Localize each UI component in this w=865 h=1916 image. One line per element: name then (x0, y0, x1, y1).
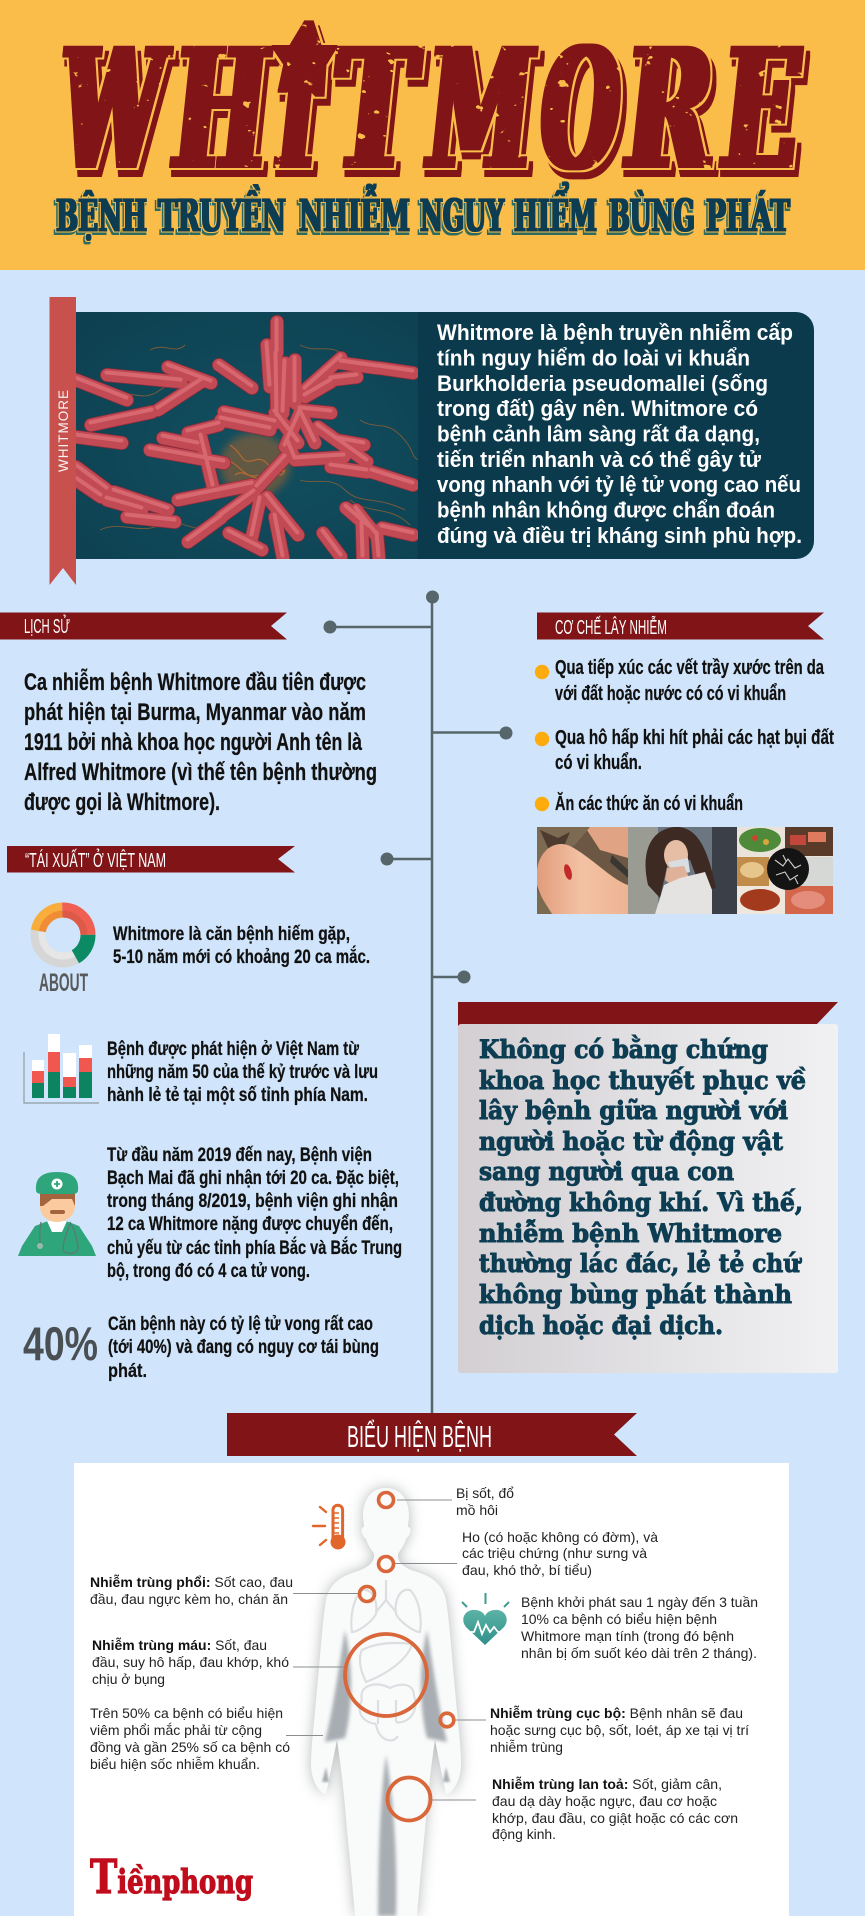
label: cough: đau, khó thở, bí tiểu) (462, 1563, 592, 1578)
intro text: tính nguy hiểm do loài vi khuẩn (437, 346, 750, 370)
label: over 50 percent (90, 1706, 290, 1772)
subtitle: NHIỄM (299, 182, 410, 242)
marker circles (345, 1492, 454, 1820)
fact 1 text: 5-10 năm mới có khoảng 20 ca mắc. (113, 944, 370, 968)
banner: Tái xuất ở Việt Nam (7, 846, 295, 872)
subtitle: TRUYỀN (158, 183, 286, 242)
ribbon: WHITMORE: WHITMORE (56, 390, 71, 472)
transmission bullet list: có vi khuẩn. (555, 752, 642, 774)
photo: food collage (737, 827, 833, 914)
intro panel (76, 312, 814, 559)
label: lung infection: đầu, đau ngực kèm ho, chán ăn (90, 1592, 288, 1607)
fact 2 text (107, 1038, 378, 1106)
callout text: sang người qua con (479, 1157, 734, 1186)
icon: bar chart (24, 1034, 99, 1103)
label: onset: Whitmore mạn tính (trong đó bệnh (521, 1629, 734, 1644)
fact 4 text (108, 1313, 379, 1382)
fact 1 text (113, 923, 370, 968)
banner: Tái xuất ở Việt Nam: “TÁI XUẤT” Ở VIỆT NAM (25, 848, 166, 872)
title: WHITMORE: M (419, 13, 542, 207)
fact 3 text: Bạch Mai đã ghi nhận tới 20 ca. Đặc biệt, (107, 1167, 399, 1189)
label: disseminated infection (492, 1776, 738, 1842)
label: local infection: nhiễm trùng (490, 1739, 563, 1755)
label: lung infection: Nhiễm trùng phổi: Sốt cao, đau (90, 1574, 293, 1590)
banner: Lịch sử: LỊCH SỬ (24, 614, 70, 638)
intro text: Whitmore là bệnh truyền nhiễm cấp (437, 320, 793, 345)
organs (351, 1580, 421, 1740)
label: onset: Bệnh khởi phát sau 1 ngày đến 3 tuần (521, 1595, 758, 1610)
callout text: nhiễm bệnh Whitmore (479, 1219, 782, 1248)
callout text: người hoặc từ động vật (479, 1127, 783, 1156)
label: disseminated infection: khớp, đau đầu, co giật hoặc có các cơn (492, 1811, 738, 1826)
ribbon: WHITMORE (50, 297, 76, 585)
fact 2 text: hành lẻ tẻ tại một số tỉnh phía Nam. (107, 1084, 368, 1106)
label: local infection: hoặc sưng cục bộ, sốt, loét, áp xe tại vị trí (490, 1723, 749, 1738)
label: onset (521, 1595, 758, 1661)
subtitle (56, 180, 790, 242)
label: fever: mồ hôi (456, 1503, 498, 1518)
label: disseminated infection: Nhiễm trùng lan toả: Sốt, giảm cân, (492, 1776, 722, 1792)
label: fever: Bị sốt, đổ (456, 1486, 514, 1501)
label: over 50 percent: viêm phổi mắc phải từ cộng (90, 1722, 262, 1738)
callout text: Không có bằng chứng (479, 1035, 768, 1064)
transmission bullet list: Ăn các thức ăn có vi khuẩn (555, 792, 743, 815)
subtitle: BỆNH (56, 188, 147, 242)
callout text: không bùng phát thành (479, 1280, 792, 1309)
logo: Tiền phong: Tiềnphong (90, 1850, 253, 1905)
fact 2 text: Bệnh được phát hiện ở Việt Nam từ (107, 1038, 360, 1060)
history text: phát hiện tại Burma, Myanmar vào năm (24, 699, 366, 726)
label: over 50 percent: biểu hiện sốc nhiễm khuẩn. (90, 1756, 260, 1772)
title: WHITMORE (51, 13, 809, 207)
label: blood infection: chịu ở bụng (92, 1672, 165, 1687)
title: WHITMORE: T (323, 13, 425, 207)
intro text: đúng và điều trị kháng sinh phù hợp. (437, 523, 802, 548)
history text: Ca nhiễm bệnh Whitmore đầu tiên được (24, 668, 366, 696)
banner: Cơ chế lây nhiễm: CƠ CHẾ LÂY NHIỄM (555, 616, 667, 639)
icon: doctor (18, 1172, 96, 1256)
fact 3 text: bộ, trong đó có 4 ca tử vong. (107, 1260, 310, 1282)
intro text: bệnh nhân không được chẩn đoán (437, 498, 775, 522)
banner: Cơ chế lây nhiễm (537, 612, 824, 640)
intro text (437, 320, 802, 548)
stat: 40%: 40% (23, 1317, 98, 1370)
label: onset: 10% ca bệnh có biểu hiện bệnh (521, 1612, 717, 1627)
banner: Lịch sử (0, 612, 287, 640)
heart icon (462, 1593, 509, 1645)
transmission bullet list (535, 657, 834, 815)
title: WHITMORE: I (270, 13, 326, 207)
label: blood infection (92, 1637, 289, 1687)
title: WHITMORE: W (51, 13, 173, 207)
callout text (479, 1035, 806, 1340)
history text (24, 668, 377, 816)
label: blood infection: Nhiễm trùng máu: Sốt, đau (92, 1637, 267, 1653)
icon: about donut: ABOUT (39, 969, 88, 997)
fact 3 text: Từ đầu năm 2019 đến nay, Bệnh viện (107, 1144, 372, 1166)
subtitle: HIỂM (514, 180, 597, 242)
photo: skin abrasion (536, 827, 628, 914)
header band (0, 0, 865, 270)
label: lung infection (90, 1574, 293, 1607)
title: WHITMORE: H (165, 13, 277, 207)
fact 3 text: 12 ca Whitmore nặng được chuyển đến, (107, 1213, 393, 1235)
history text: được gọi là Whitmore). (24, 789, 220, 816)
fact 3 text: chủ yếu từ các tỉnh phía Bắc và Bắc Trung (107, 1235, 402, 1259)
bacteria image (76, 312, 418, 559)
label: local infection (490, 1705, 749, 1755)
label: over 50 percent: đồng và gần 25% số ca bệnh có (90, 1740, 290, 1755)
subtitle: NGUY (420, 191, 504, 242)
human body figure (311, 1488, 461, 1916)
symptoms white panel (74, 1463, 789, 1916)
banner: Biểu hiện bệnh: BIỂU HIỆN BỆNH (347, 1419, 492, 1454)
label: disseminated infection: đau dạ dày hoặc ngực, đau cơ hoặc (492, 1794, 717, 1809)
intro text: trong đất) gây nên. Whitmore có (437, 396, 758, 421)
fact 4 text: Căn bệnh này có tỷ lệ tử vong rất cao (108, 1313, 373, 1335)
label: fever (456, 1486, 514, 1518)
history text: Alfred Whitmore (vì thế tên bệnh thường (24, 759, 377, 786)
thermometer icon (313, 1505, 346, 1550)
label: disseminated infection: động kinh. (492, 1827, 556, 1842)
intro text: Burkholderia pseudomallei (sống (437, 371, 768, 396)
fact 4 text: (tới 40%) và đang có nguy cơ tái bùng (108, 1336, 379, 1358)
intro text: bệnh cảnh lâm sàng rất đa dạng, (437, 422, 760, 446)
title: WHITMORE: E (714, 13, 809, 207)
callout text: khoa học thuyết phục về (479, 1066, 806, 1095)
timeline connector (324, 590, 512, 1413)
callout text: lây bệnh giữa người với (479, 1096, 788, 1125)
intro text: tiến triển nhanh và có thể gây tử (437, 447, 761, 472)
fact 1 text: Whitmore là căn bệnh hiếm gặp, (113, 923, 350, 945)
fact 3 text (107, 1144, 402, 1282)
intro text: vong nhanh với tỷ lệ tử vong cao nếu (437, 472, 801, 497)
callout text: thường lác đác, lẻ tẻ chứ (479, 1249, 803, 1278)
callout box (458, 1002, 838, 1373)
label: cough: các triệu chứng (như sưng và (462, 1546, 647, 1561)
label: cough (462, 1530, 658, 1578)
leader lines (286, 1500, 486, 1800)
fact 3 text: trong tháng 8/2019, bệnh viện ghi nhận (107, 1190, 398, 1212)
callout text: dịch hoặc đại dịch. (479, 1311, 723, 1340)
callout text: đường không khí. Vì thế, (479, 1188, 803, 1217)
banner: Biểu hiện bệnh (227, 1413, 637, 1456)
label: over 50 percent: Trên 50% ca bệnh có biểu hiện (90, 1706, 283, 1721)
fact 4 text: phát. (108, 1360, 147, 1382)
label: blood infection: đầu, suy hô hấp, đau khớp, khó (92, 1655, 289, 1670)
fact 2 text: những năm 50 của thế kỷ trước và lưu (107, 1061, 378, 1083)
title: WHITMORE: R (617, 13, 724, 207)
subtitle: BÙNG (609, 189, 695, 242)
subtitle: PHÁT (706, 189, 790, 242)
history text: 1911 bởi nhà khoa học người Anh tên là (24, 729, 362, 756)
label: onset: nhân bị ốm suốt kéo dài trên 2 tháng). (521, 1646, 757, 1661)
icon: about donut (38, 910, 88, 997)
title: WHITMORE: O (532, 13, 629, 207)
label: cough: Ho (có hoặc không có đờm), và (462, 1530, 658, 1545)
label: local infection: Nhiễm trùng cục bộ: Bệnh nhân sẽ đau (490, 1705, 743, 1721)
photo: woman coughing (628, 827, 737, 914)
